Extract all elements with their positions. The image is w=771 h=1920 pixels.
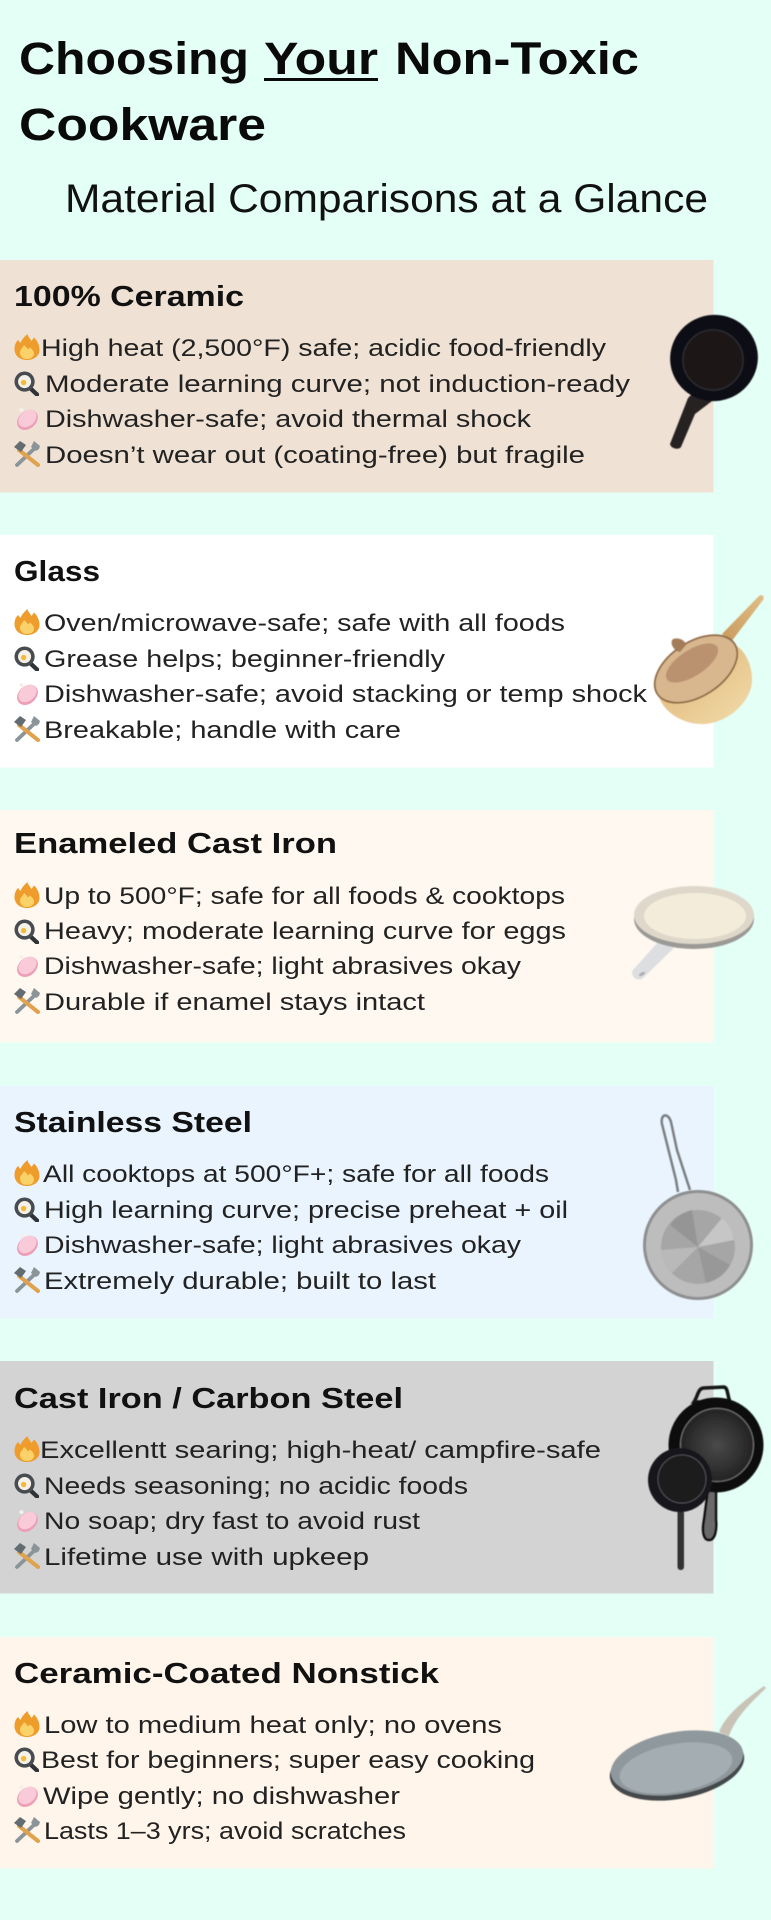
text block: ceramic details bbox=[41, 335, 630, 469]
text block: enameled details: Dishwasher-safe; light abrasives okay bbox=[44, 953, 521, 980]
panel: Glass bbox=[0, 535, 714, 768]
panel: Cast Iron / Carbon Steel bbox=[0, 1361, 714, 1594]
heading: Glass: Glass bbox=[14, 556, 100, 588]
panel: Stainless Steel bbox=[0, 1086, 714, 1318]
heading: Stainless Steel: Stainless Steel bbox=[14, 1107, 252, 1139]
icon: cream enameled skillet bbox=[632, 886, 754, 979]
text block: ceramic details: Moderate learning curve; not induction-ready bbox=[45, 371, 630, 398]
icons: enameled row markers bbox=[13, 882, 42, 1012]
text block: ceramic details: Doesn’t wear out (coating-free) but fragile bbox=[45, 442, 585, 469]
text block: stainless details bbox=[43, 1161, 568, 1295]
heading: Cast Iron / Carbon Steel: Cast Iron / Carbon Steel bbox=[14, 1383, 403, 1415]
icon: two cast iron and carbon steel pans bbox=[648, 1387, 764, 1570]
text block: cast iron details: Excellentt searing; high-heat/ campfire-safe bbox=[40, 1437, 601, 1464]
text block: glass details: Oven/microwave-safe; safe with all foods bbox=[44, 610, 565, 637]
icons: glass row markers bbox=[13, 609, 42, 740]
text block: cast iron details: Needs seasoning; no acidic foods bbox=[44, 1473, 468, 1500]
icon: amber glass saucepan bbox=[643, 595, 764, 724]
text block: cast iron details: No soap; dry fast to avoid rust bbox=[44, 1508, 420, 1535]
heading: 100% Ceramic: 100% Ceramic bbox=[14, 281, 244, 313]
subtitle: Material Comparisons at a Glance bbox=[65, 177, 708, 221]
text block: stainless details: High learning curve; precise preheat + oil bbox=[44, 1197, 568, 1224]
title bbox=[19, 33, 639, 150]
text block: stainless details: Dishwasher-safe; light abrasives okay bbox=[44, 1232, 521, 1259]
text block: ceramic details: High heat (2,500°F) safe; acidic food-friendly bbox=[41, 335, 606, 362]
panel: Ceramic-Coated Nonstick bbox=[0, 1637, 714, 1868]
heading: Ceramic-Coated Nonstick: Ceramic-Coated Nonstick bbox=[14, 1658, 440, 1690]
panel: 100% Ceramic bbox=[0, 260, 714, 492]
heading: Enameled Cast Iron: Enameled Cast Iron bbox=[14, 828, 337, 860]
text block: nonstick details: Wipe gently; no dishwasher bbox=[43, 1783, 400, 1810]
title: Non-Toxic bbox=[395, 33, 639, 84]
text block: stainless details: All cooktops at 500°F+; safe for all foods bbox=[43, 1161, 549, 1188]
text block: nonstick details: Lasts 1–3 yrs; avoid scratches bbox=[44, 1818, 406, 1845]
text block: enameled details: Heavy; moderate learning curve for eggs bbox=[44, 918, 566, 945]
icons: cast iron row markers bbox=[13, 1436, 42, 1567]
icon: stainless steel frying pan bbox=[643, 1115, 753, 1300]
text block: glass details: Grease helps; beginner-friendly bbox=[44, 646, 445, 673]
text block: enameled details bbox=[44, 883, 566, 1016]
icons: stainless row markers bbox=[13, 1160, 42, 1291]
title: Your bbox=[264, 33, 378, 84]
text block: stainless details: Extremely durable; built to last bbox=[44, 1268, 436, 1295]
text block: enameled details: Durable if enamel stays intact bbox=[44, 989, 425, 1016]
icons: nonstick row markers bbox=[13, 1711, 42, 1841]
panel: Enameled Cast Iron bbox=[0, 810, 714, 1042]
text block: glass details bbox=[44, 610, 648, 744]
text block: ceramic details: Dishwasher-safe; avoid thermal shock bbox=[45, 406, 532, 433]
text block: cast iron details bbox=[40, 1437, 601, 1571]
icon: black ceramic skillet bbox=[658, 303, 770, 449]
text block: nonstick details: Low to medium heat only; no ovens bbox=[44, 1712, 502, 1739]
title: Choosing bbox=[19, 33, 249, 84]
icons: ceramic row markers bbox=[13, 334, 42, 465]
icon: grey ceramic nonstick pan bbox=[604, 1686, 766, 1810]
text block: glass details: Breakable; handle with care bbox=[44, 717, 401, 744]
text block: glass details: Dishwasher-safe; avoid stacking or temp shock bbox=[44, 681, 648, 708]
text block: nonstick details: Best for beginners; super easy cooking bbox=[41, 1747, 535, 1774]
title: Cookware bbox=[19, 99, 266, 150]
text block: enameled details: Up to 500°F; safe for all foods & cooktops bbox=[44, 883, 565, 910]
text block: nonstick details bbox=[41, 1712, 535, 1845]
text block: cast iron details: Lifetime use with upkeep bbox=[44, 1544, 369, 1571]
